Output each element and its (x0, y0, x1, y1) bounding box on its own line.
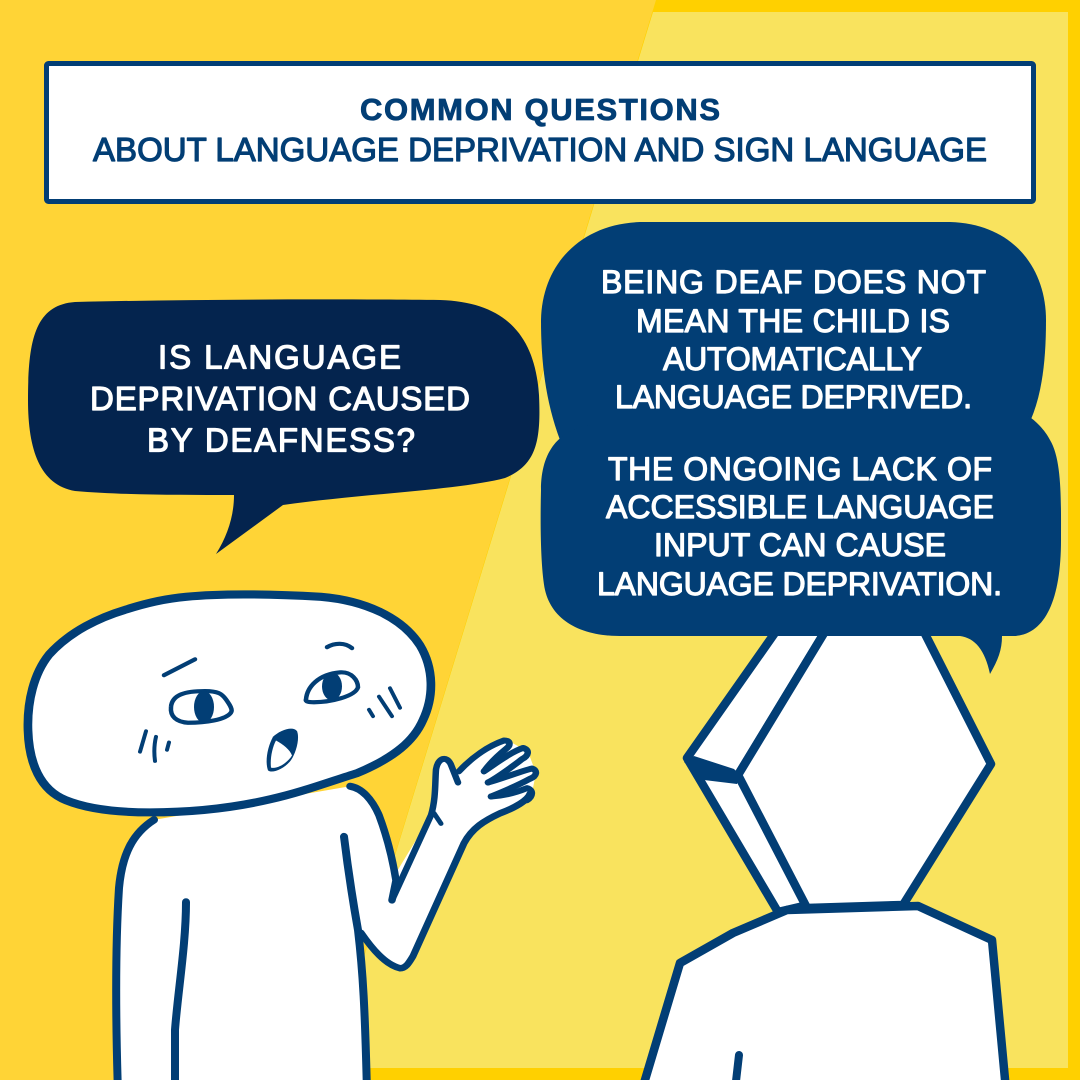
answer text lower: INPUT CAN CAUSE (654, 527, 946, 563)
speech bubble: answer (541, 222, 1061, 674)
body and raised arm (116, 741, 536, 1080)
blush marks right (369, 688, 400, 716)
left eye (171, 691, 232, 723)
shoulders and torso (642, 906, 1006, 1080)
right figure: hexagon-headed person seen from behind (642, 620, 1006, 1080)
hexagon head back side (687, 620, 832, 912)
question text: IS LANGUAGE (158, 338, 401, 376)
head shadow band (684, 756, 740, 784)
right eye (306, 672, 358, 702)
lower answer bubble with tail (541, 416, 1061, 674)
wrist mark (434, 813, 441, 824)
left figure: waving round-headed person (28, 594, 536, 1080)
mouth (267, 729, 298, 772)
hexagon head front face (738, 620, 991, 908)
answer text upper: LANGUAGE DEPRIVED. (615, 379, 972, 415)
eyebrows (164, 659, 195, 675)
speech bubble: question (28, 299, 539, 554)
answer text lower: ACCESSIBLE LANGUAGE (606, 489, 994, 525)
answer text lower: LANGUAGE DEPRIVATION. (597, 566, 1002, 602)
heading line one: COMMON QUESTIONS (360, 92, 720, 127)
question text (90, 338, 470, 458)
blush marks left (140, 731, 169, 761)
question text: BY DEAFNESS? (147, 422, 415, 458)
heading line two: ABOUT LANGUAGE DEPRIVATION AND SIGN LANGUAGE (93, 131, 987, 168)
answer text upper: MEAN THE CHILD IS (636, 303, 950, 339)
fingers (459, 741, 536, 800)
face (140, 644, 400, 772)
answer text lower (597, 451, 1002, 602)
round head (28, 594, 431, 812)
answer text upper: BEING DEAF DOES NOT (601, 264, 986, 300)
answer text upper: AUTOMATICALLY (663, 341, 922, 377)
title box (46, 64, 1034, 202)
answer text upper (601, 264, 986, 415)
question text: DEPRIVATION CAUSED (90, 380, 470, 417)
arm line (735, 1055, 739, 1080)
answer text lower: THE ONGOING LACK OF (608, 451, 992, 487)
upper answer bubble (541, 222, 1046, 440)
